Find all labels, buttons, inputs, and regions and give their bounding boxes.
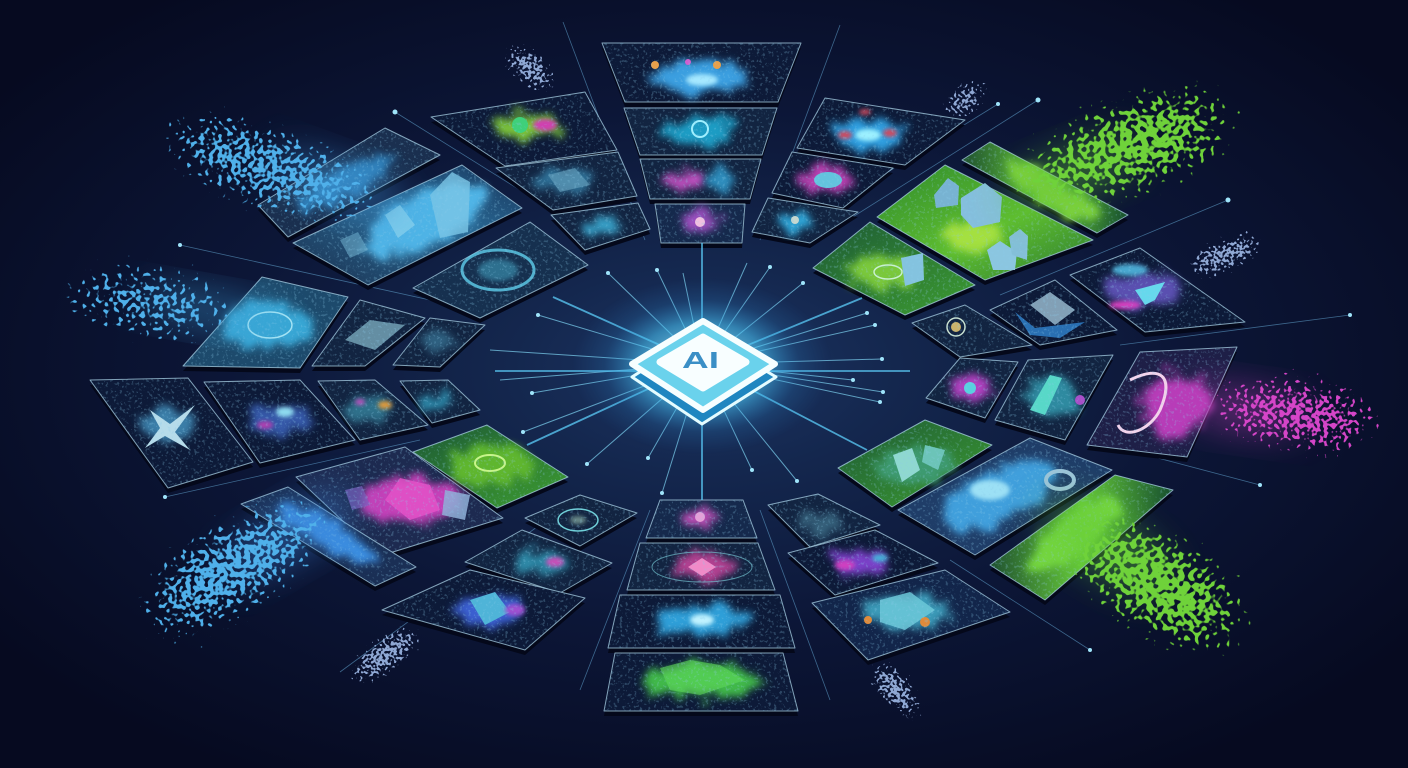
- panel: left blue card large: [293, 165, 522, 285]
- panel: bottom-right card 1: [768, 494, 880, 547]
- particle cloud: magenta right: [1188, 364, 1399, 466]
- panel: upper-right green strip card: [962, 142, 1128, 233]
- panel: left blue card strip: [258, 128, 440, 237]
- panel: left blue card ring: [413, 222, 588, 318]
- panel: lower-left blue card: [241, 487, 416, 586]
- panel texture speckle: [90, 43, 1245, 711]
- panel: upper-right green card small: [813, 222, 975, 315]
- chip inner label plate: [660, 337, 746, 388]
- panel: far-left row card 3: [318, 380, 428, 440]
- panel: upper-right row card 1: [912, 305, 1032, 357]
- panel: top column card 2: [624, 108, 777, 155]
- panel: upper-right row card 2: [990, 280, 1117, 345]
- chip lower layer: [632, 332, 776, 424]
- panel: upper-right row card 3: [1070, 248, 1245, 332]
- panel: left row card small: [393, 318, 485, 367]
- panel: lower-left magenta card: [296, 447, 503, 556]
- thick beams: [495, 243, 910, 500]
- panel: left row card crystals: [312, 300, 425, 366]
- panel: upper-left wedge card 1: [431, 92, 617, 166]
- panel: bottom column card 4: [604, 653, 798, 711]
- panel: lower-right green card: [838, 420, 992, 507]
- panel: bottom column card 2: [627, 543, 775, 590]
- panel: upper-right wedge card 1: [797, 98, 965, 165]
- panel: left row card cyan: [183, 277, 348, 368]
- panel: upper-right wedge card 2: [772, 152, 893, 208]
- panel: upper-right green card large with cubes: [877, 165, 1093, 280]
- particle cloud: cyan left: [36, 249, 268, 355]
- core glow: [572, 278, 832, 454]
- panel: lower-right bright green card: [990, 475, 1173, 600]
- panel drop shadows: [90, 48, 1245, 716]
- particle cloud: blue lower left: [107, 468, 361, 672]
- particle cloud: blue upper left: [133, 88, 407, 248]
- panel: top column card 4: [655, 204, 745, 243]
- particle cloud: green upper right: [988, 59, 1260, 231]
- panel: bottom-left small card 3: [382, 570, 585, 650]
- thin outer connector lines: [163, 22, 1352, 700]
- panel: upper-left wedge card 3: [551, 203, 650, 250]
- AI core chip: [572, 278, 832, 454]
- chip top frame: [632, 321, 775, 410]
- panel: top column card 3: [640, 159, 761, 199]
- panel: bottom-left small card 1: [525, 495, 637, 546]
- icon: cube buildings: [934, 178, 1028, 270]
- panel: bottom-right card 2: [788, 530, 938, 595]
- panel: far-left row card 4: [400, 380, 480, 423]
- particle cloud: faint grey wisps: [335, 30, 1276, 733]
- panel: right row card 2: [995, 355, 1113, 440]
- panel: upper-right wedge card 3: [752, 198, 858, 243]
- panel: far-left row card 1: [90, 378, 253, 488]
- panel: bottom column card 1: [646, 500, 757, 538]
- panel: bottom column card 3: [608, 595, 795, 648]
- particle glow: soft colour halos: [139, 130, 1307, 602]
- panel: right row card 1: [926, 358, 1018, 418]
- AI label: AI: [682, 347, 719, 373]
- panel: bottom-right card 3: [812, 570, 1010, 660]
- panel: bottom-left small card 2: [465, 530, 612, 593]
- panel: upper-left wedge card 2: [496, 152, 637, 210]
- panel: right row magenta card: [1087, 347, 1237, 457]
- rays from AI core: [490, 243, 910, 500]
- panel: top column card 1: [602, 43, 801, 102]
- particle cloud: green lower right: [1032, 484, 1278, 686]
- panel: lower-left green card: [413, 425, 568, 508]
- panel: lower-right blue card: [898, 438, 1112, 555]
- panel: far-left row card 2: [204, 380, 355, 463]
